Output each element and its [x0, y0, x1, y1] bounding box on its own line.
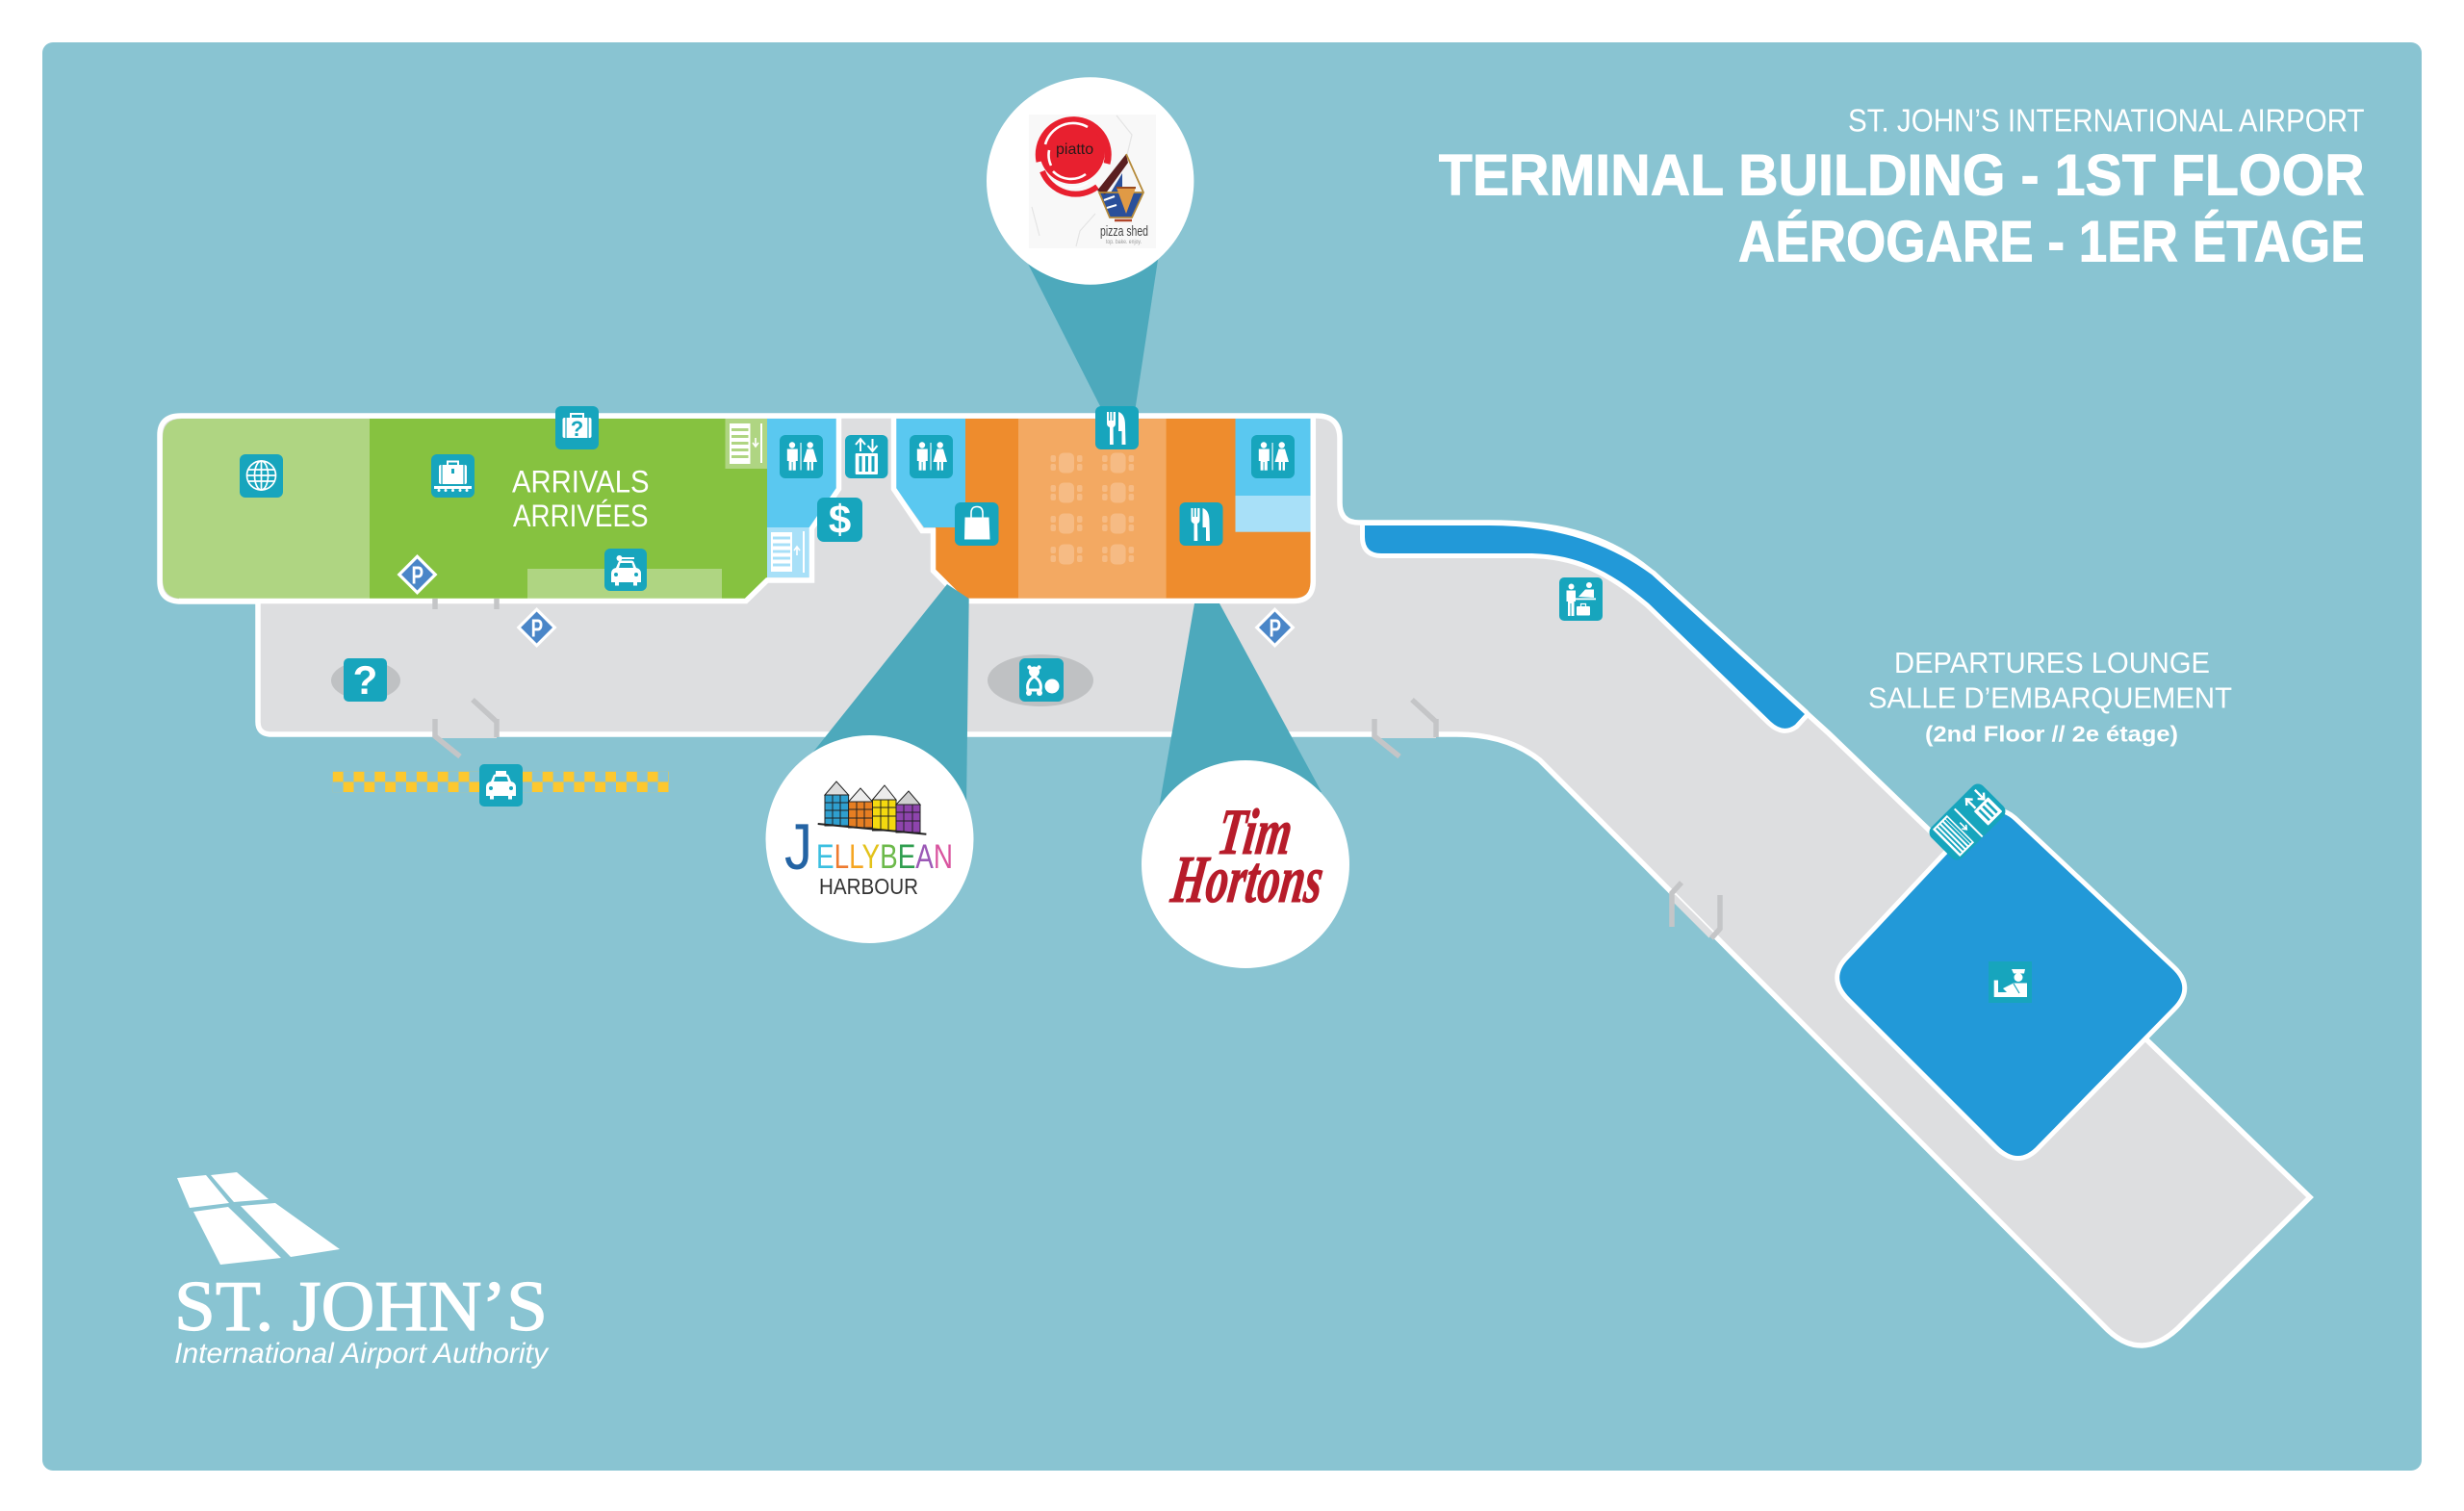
stairs up block — [767, 527, 810, 577]
tim wordmark: Tim — [1214, 795, 1297, 868]
arrivals dark green area — [370, 419, 767, 599]
heading: arrivals: ARRIVÉES — [513, 499, 649, 533]
icon: restroom 1 — [780, 435, 823, 478]
title french: AÉROGARE - 1ER ÉTAGE — [1738, 210, 2365, 274]
info desk pad — [331, 661, 400, 700]
icon: lost luggage — [555, 406, 599, 449]
panel: arrivals hall — [163, 419, 767, 599]
interior white walls — [179, 416, 1313, 601]
orange retail area — [936, 419, 1311, 599]
title block — [1439, 103, 2365, 274]
callout cone: pizza — [1026, 260, 1158, 412]
jellybean letters: ELLYBEAN — [816, 838, 953, 876]
icon: information: ? — [353, 657, 377, 703]
icon: currency exchange — [817, 497, 862, 542]
restroom blue area right — [1236, 419, 1311, 496]
heading: arrivals: ARRIVALS — [512, 465, 649, 499]
panel: terminal floor outline — [160, 416, 2310, 1345]
jellybean letters: J — [784, 810, 812, 884]
restroom blue area centre — [896, 419, 965, 527]
icon: globe — [240, 454, 283, 498]
logo tagline: International Airport Authority — [174, 1338, 550, 1370]
icon: elevator — [845, 435, 887, 478]
piatto swirl — [1039, 118, 1108, 194]
airport name: ST. JOHN’S INTERNATIONAL AIRPORT — [1848, 103, 2365, 139]
icon: parking 1 — [397, 554, 437, 595]
restroom blue area — [767, 419, 836, 527]
icon: car rental — [604, 549, 647, 591]
departures lounge label: SALLE D’EMBARQUEMENT — [1868, 681, 2232, 715]
callout: tim hortons — [1142, 760, 1349, 968]
icon: currency exchange: $ — [829, 497, 851, 542]
pale blue room — [1236, 496, 1311, 532]
logo wordmark: ST. JOHN’S — [174, 1268, 548, 1346]
logo runway mark — [177, 1172, 340, 1265]
jellybean letters — [784, 810, 953, 884]
arrivals light green area — [163, 419, 767, 599]
callout cone: tim hortons — [1159, 603, 1322, 808]
logo: st. john's international airport authority — [174, 1172, 550, 1370]
play area pad — [988, 654, 1093, 706]
icon: restaurant right — [1180, 502, 1222, 546]
callout: jellybean harbour — [766, 735, 974, 943]
icon: lost luggage: ? — [571, 417, 583, 441]
heading: arrivals — [512, 465, 649, 533]
pizza shed tagline: top. bake. enjoy. — [1106, 240, 1142, 245]
departures lounge label — [1868, 646, 2232, 747]
icon: check-in — [1559, 577, 1603, 621]
marble card — [1029, 115, 1156, 248]
departures lounge label: DEPARTURES LOUNGE — [1894, 646, 2210, 679]
icon: restroom 3 — [1251, 435, 1295, 478]
icon: information — [344, 657, 387, 703]
hortons wordmark: Hortons — [1167, 842, 1328, 917]
harbour word: HARBOUR — [819, 874, 918, 899]
icon: baggage claim — [431, 454, 475, 498]
stairs down block — [726, 419, 767, 469]
piatto swirl: piatto — [1056, 141, 1093, 158]
pizza shed name: pizza shed — [1100, 224, 1148, 240]
callout: piatto and pizza shed — [987, 77, 1194, 285]
rental counter block — [527, 569, 722, 599]
dining tables — [1051, 452, 1134, 564]
row of houses — [818, 781, 926, 834]
seating area — [1018, 419, 1167, 599]
icon: parking 2 — [517, 607, 557, 648]
panel: security check area departures corridor — [1365, 525, 1805, 729]
icon: shopping bag — [955, 502, 999, 546]
icon: restaurant top — [1095, 406, 1139, 449]
icon: play area — [1019, 658, 1064, 702]
pizza shed house — [1097, 154, 1143, 220]
panel: restroom and stairs block left — [767, 419, 836, 577]
title english: TERMINAL BUILDING - 1ST FLOOR — [1439, 143, 2365, 208]
icon: stairs and elevator rotated — [1926, 781, 2009, 863]
icon: restroom 2 — [910, 435, 953, 478]
doors — [435, 599, 1720, 938]
taxi stand checker strip — [333, 772, 669, 792]
departures lounge label: (2nd Floor // 2e étage) — [1925, 722, 2178, 747]
panel: departures lounge — [1839, 812, 2182, 1156]
icon: taxi — [479, 764, 523, 807]
icon: customs officer — [1989, 961, 2032, 1003]
panel: food court and shops — [896, 419, 1311, 599]
icon: parking 3 — [1255, 607, 1296, 648]
callout cone: jellybean — [807, 584, 969, 808]
